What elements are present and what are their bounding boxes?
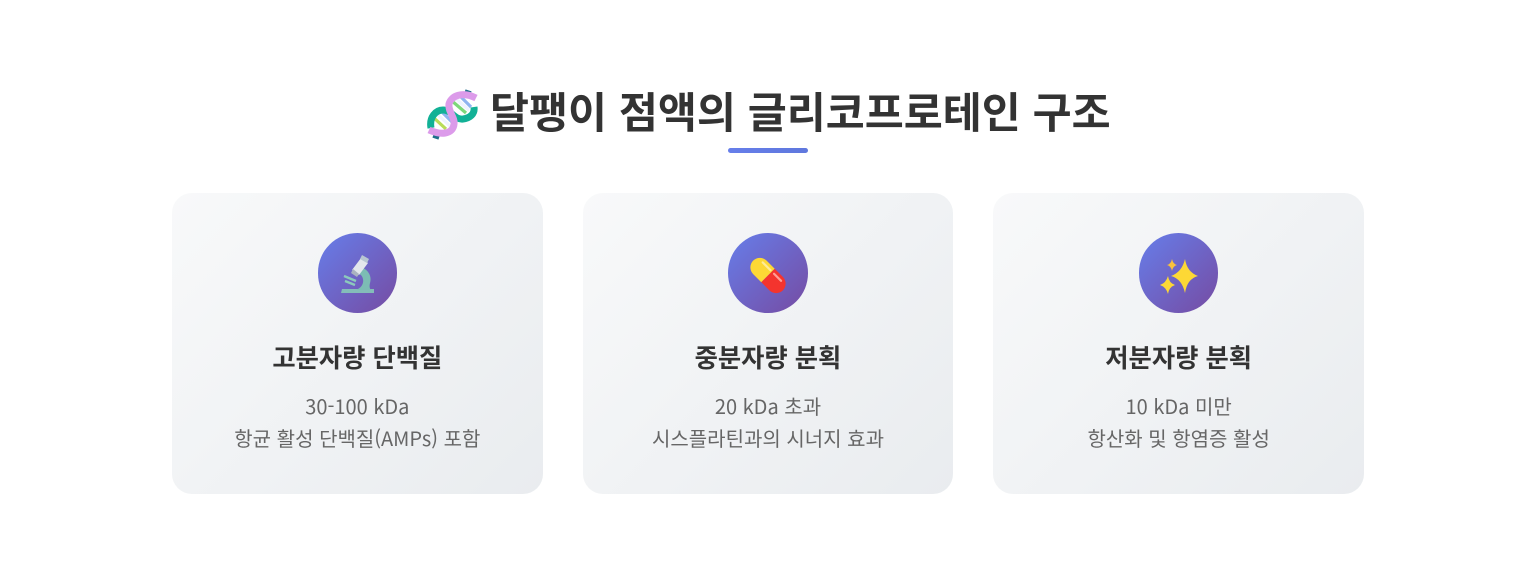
card description: 20 kDa 초과 [715,391,821,420]
card description [1087,391,1270,452]
icon: microscope [318,233,397,312]
title underline accent [728,148,808,153]
card description [652,391,884,452]
icon: DNA helix [427,89,478,140]
card description [234,391,480,452]
card heading: 고분자량 단백질 [272,339,442,375]
card description: 10 kDa 미만 [1126,391,1232,420]
icon: pill [728,233,808,312]
title text: 달팽이 점액의 글리코프로테인 구조 [490,80,1111,141]
card description: 항산화 및 항염증 활성 [1087,423,1270,452]
panel: high molecular weight protein [172,193,543,494]
card description: 시스플라틴과의 시너지 효과 [652,423,884,452]
card description: 30-100 kDa [305,391,409,420]
card heading: 저분자량 분획 [1105,339,1252,375]
icon: sparkles [1139,233,1218,312]
title [427,80,1111,141]
card description: 항균 활성 단백질(AMPs) 포함 [234,423,480,452]
card heading: 중분자량 분획 [695,339,841,375]
panel: medium molecular weight fraction [583,193,953,494]
panel: low molecular weight fraction [993,193,1364,494]
